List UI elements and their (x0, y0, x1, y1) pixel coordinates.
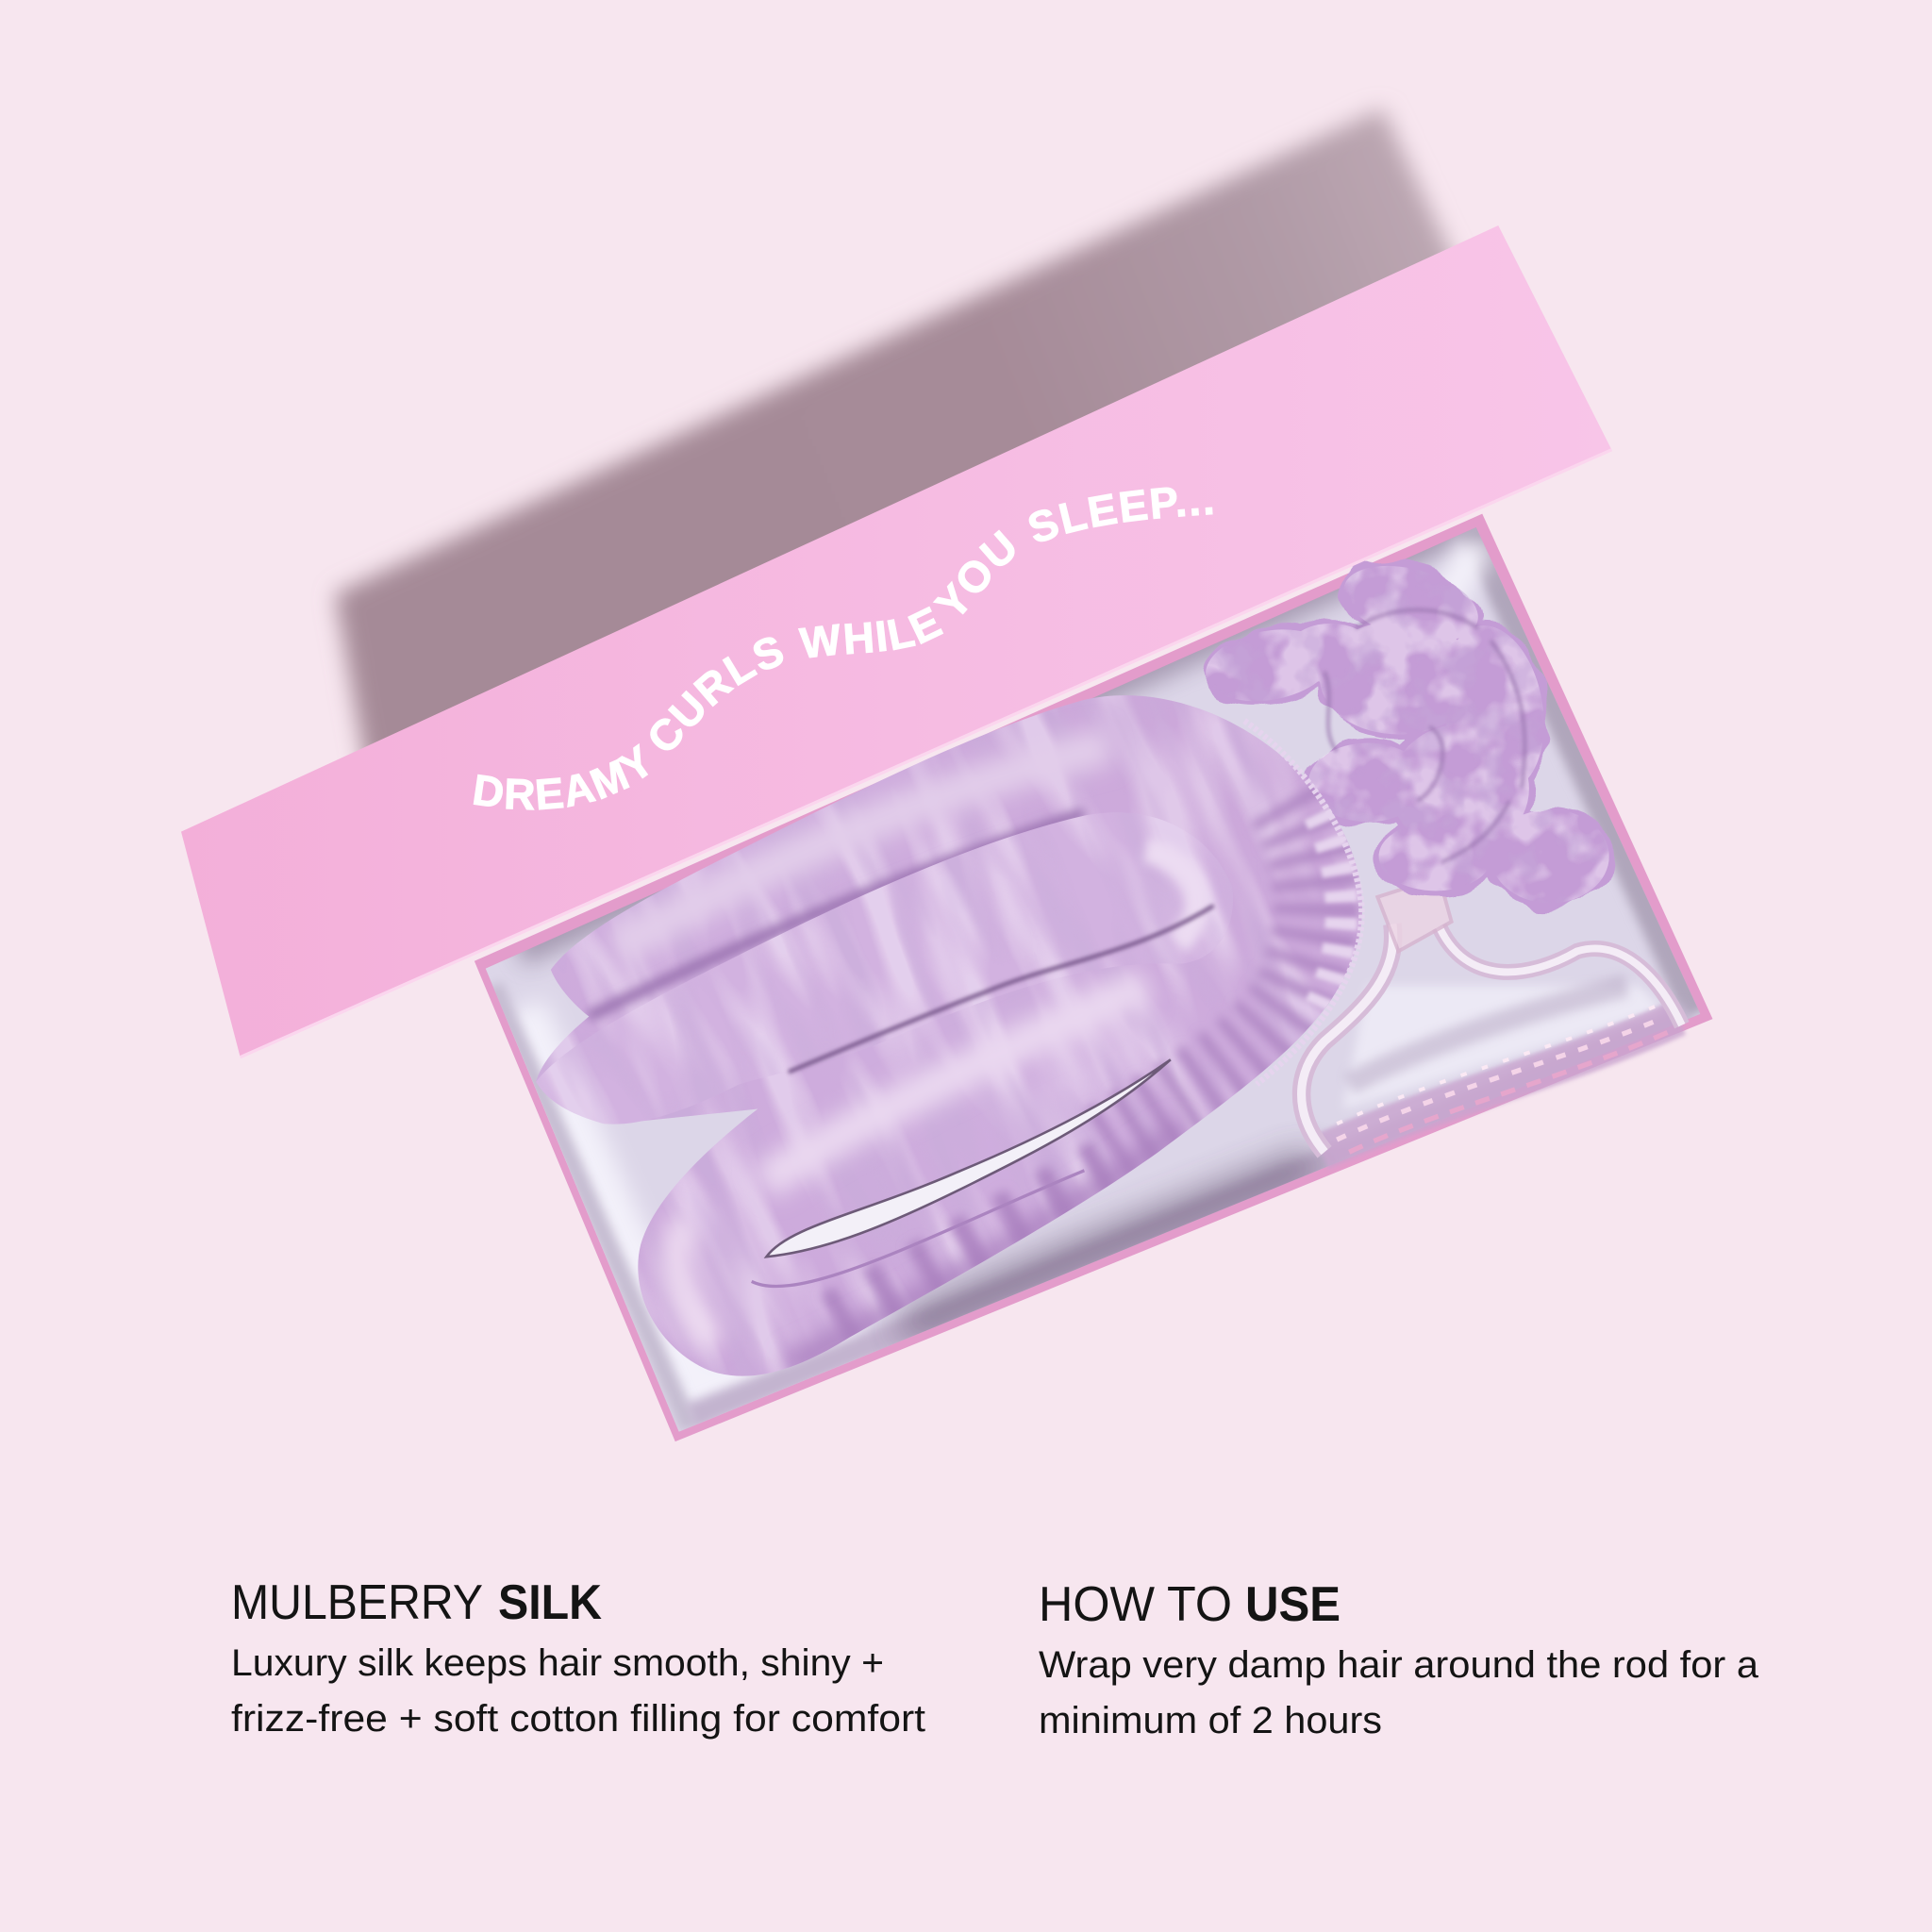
body: mulberry silk (231, 1642, 925, 1740)
lid slogan (curved text): DREAMY CURLS WHILE YOU SLEEP... (474, 487, 1213, 810)
product photo: silk curling set in box (181, 102, 1713, 1441)
heading: how to use (1039, 1577, 1341, 1632)
silk heatless curling rod (536, 695, 1364, 1376)
lid cast shadow (335, 108, 1497, 789)
body: how to use (1039, 1644, 1759, 1741)
body: mulberry silk: frizz-free + soft cotton filling for comfort (231, 1698, 925, 1740)
heading: mulberry silk: MULBERRY (231, 1575, 483, 1630)
body: how to use: minimum of 2 hours (1039, 1700, 1382, 1741)
text block: mulberry silk (231, 1575, 925, 1740)
heading: how to use: USE (1245, 1577, 1341, 1632)
gift box base (475, 514, 1713, 1441)
scrunchie (1204, 558, 1615, 915)
body: how to use: Wrap very damp hair around the rod for a (1039, 1644, 1759, 1686)
middle strand (536, 813, 1220, 1124)
claw clip (1302, 877, 1682, 1152)
heading: mulberry silk: SILK (498, 1575, 602, 1630)
heading: how to use: HOW TO (1039, 1577, 1232, 1632)
text block: how to use (1039, 1577, 1759, 1741)
box lid (181, 225, 1611, 1058)
body: mulberry silk: Luxury silk keeps hair smooth, shiny + (231, 1642, 884, 1684)
